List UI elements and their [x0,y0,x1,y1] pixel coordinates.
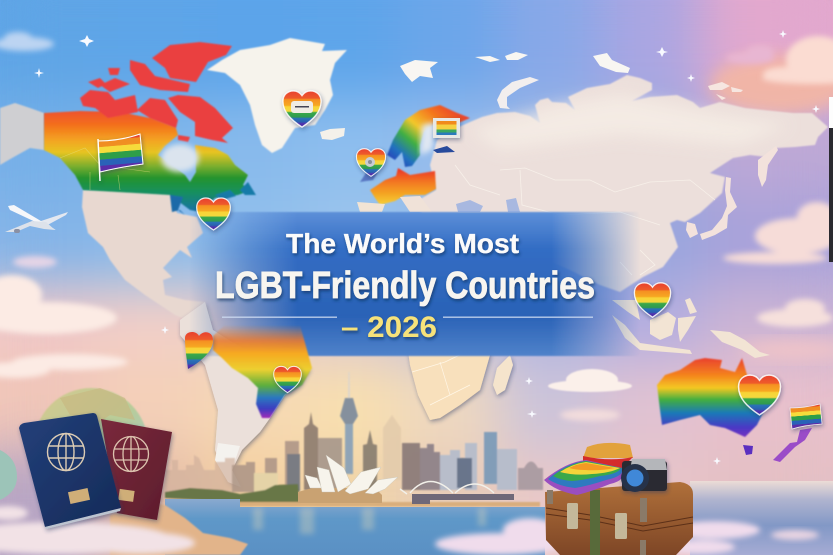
heart: Brazil [274,366,301,393]
side bar: dark [829,128,833,262]
hat crown [583,443,633,458]
icon: small globe [0,450,17,500]
dark tower [457,458,472,488]
cream building [254,473,278,492]
heart: Ireland [356,149,386,176]
opera house sails [305,455,398,494]
Arctic islands [80,42,233,143]
blue passport cover [19,413,121,527]
brim violet [544,460,624,495]
bridge platform [412,494,514,504]
land: Southeast Asia [612,298,770,358]
camera top plate [630,459,667,470]
cloud: top left [0,32,54,51]
cloud: white bank [0,506,195,554]
Great Lakes [170,195,185,215]
bottom left clouds [0,503,248,555]
cloud: upper right small [726,45,774,64]
camera lens [621,464,649,492]
suitcase seam [546,508,693,531]
brim green [553,461,621,481]
suitcase latches [567,503,627,539]
land: Iceland [320,128,345,140]
land: Italy and Balkans [400,196,432,212]
harbour water [165,499,545,555]
land: Svalbard [400,60,438,82]
domed building [518,462,543,490]
flag: Scandinavia [433,118,460,138]
side bar: white [829,97,833,128]
Atlantic Canada [215,182,256,200]
waterfront trees [165,484,300,502]
opera house base [298,488,382,503]
land: Madagascar [493,355,513,395]
rainbow: Canada [44,42,256,215]
blue passport emblem [48,433,84,471]
harbour bridge arcs [400,482,494,494]
land: Franz Josef Land [475,52,528,62]
land: Alaska [0,103,44,165]
title line two: LGBT-Friendly Countries [215,265,595,307]
title line one: The World’s Most [286,228,519,259]
Hudson Bay glow [161,144,199,172]
land: South America [180,302,310,487]
year rule right [443,316,593,318]
land: Greenland [207,38,347,153]
seas: Black Sea and Caspian [456,198,520,212]
shore [222,502,540,506]
suitcase body [545,482,693,555]
icon: red passport [101,419,172,520]
open sea at right [690,481,833,555]
heart: Southeast Asia [634,283,671,317]
land: Eurasia [410,75,828,292]
Sydney Opera House [298,455,398,503]
sparkles [34,30,820,465]
plane body [5,221,55,232]
peach glow, upper right [710,55,833,115]
heart: Australia [739,375,780,415]
red passport cover [101,419,172,520]
cloud: right pink haze [740,340,833,360]
rainbow: Australia [657,358,767,437]
skyline [165,372,543,506]
right towers [440,443,517,490]
rainbow: Brazil [213,325,312,418]
blue glass tower [484,432,497,484]
brim yellow [560,462,620,475]
heart: United States [197,198,230,230]
heart: Greenland [283,91,321,127]
distant haze buildings [165,455,235,492]
cloud: lower center haze [560,409,620,421]
title year: – 2026 [341,311,437,344]
Canada mainland [44,111,252,212]
cloud: left large [0,275,128,378]
bottom right clouds [435,518,819,555]
heart: Colombia [185,332,213,369]
observation tower [340,372,358,474]
cloud: center right [548,369,632,392]
brim blue [548,461,622,488]
shadow: British Isles [360,170,378,182]
rainbow: Scandinavia [387,105,470,167]
flag: New Zealand [790,404,822,429]
clouds behind the map [0,32,833,421]
cloud: right lower [757,299,833,327]
mid-rise block [285,441,299,491]
Baltic haze [420,122,437,155]
Africa borders [412,350,470,405]
camera body [622,461,667,491]
red passport emblem [114,436,148,472]
icon: blue passport [19,413,121,529]
tower block [402,443,420,490]
left buildings [232,458,277,492]
camera lens glass [626,470,644,486]
cloud: left upper [13,256,57,268]
land: Spain [357,202,385,212]
mid-rise block front [287,454,300,491]
suitcase strap [590,490,600,555]
cloud: under suitcase [435,518,760,555]
land: Novaya Zemlya [497,77,539,109]
icon: globe [34,388,148,502]
rainbow: Western Europe [370,168,436,205]
suitcase corner plates [547,490,647,555]
cloud: sea right [771,530,819,540]
globe sphere [34,388,148,502]
spired tower [304,412,318,490]
plane engine [14,229,20,233]
green-topped tower [363,430,377,490]
icon: suitcase [545,482,693,555]
icon: camera [621,459,667,492]
icon: airplane [5,205,68,233]
land: Severnaya Zemlya [593,53,630,73]
land: southern Africa [405,330,490,420]
central-right buildings [420,444,440,490]
brim orange [569,463,615,470]
land: United States and Mexico [82,190,213,325]
flag: Canada [98,134,143,181]
Canada province lines [60,148,150,190]
land: Sakhalin [758,146,778,187]
land: Korea [686,222,698,238]
wide tower [318,438,342,490]
red passport chip [118,489,135,502]
title text [215,228,595,344]
land: Japan [700,177,737,240]
land: Patagonia [215,443,241,487]
rainbow: Tasmania [743,445,753,455]
blue passport chip [68,488,90,504]
cloud: right middle [723,202,833,264]
cloud: top right [762,36,833,84]
plane wing rear [38,212,68,228]
water reflections [253,508,486,534]
icon: rainbow hat [544,443,633,495]
rainbow: New Zealand [773,428,812,462]
year rule left [222,316,337,318]
map pins and flags [98,91,822,429]
Gulf of Finland [433,146,455,153]
blue passport pages [45,508,121,529]
haze: northern Russia [470,95,790,150]
hat band [583,456,633,469]
cloud: peach bank [110,503,248,555]
pale tower [383,415,401,480]
land: New Siberian Islands [708,82,743,100]
plane fuselage [8,205,56,230]
land borders [455,165,715,275]
globe land [60,388,135,425]
title backdrop band [150,212,640,356]
